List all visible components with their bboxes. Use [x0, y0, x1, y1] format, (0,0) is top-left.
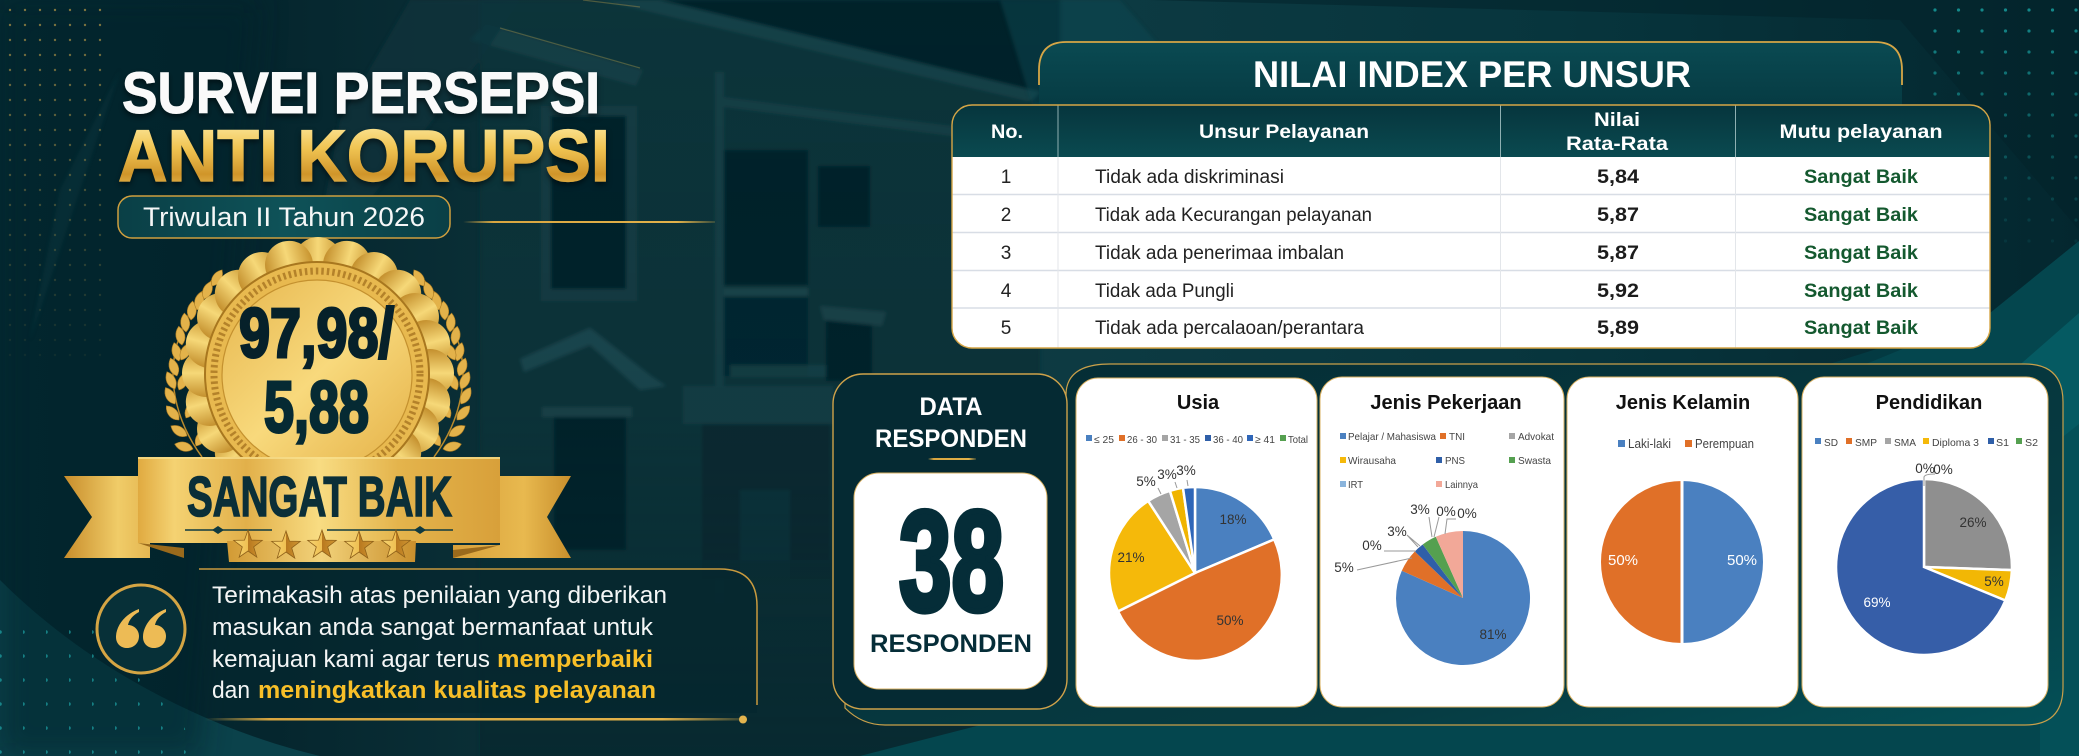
pie labels: usia: 50%	[1216, 613, 1244, 628]
pie labels: pekerjaan: 0%	[1457, 506, 1477, 521]
row 1: 1	[1001, 167, 1011, 188]
pie labels: pendidikan: 26%	[1959, 515, 1987, 530]
pie labels: usia: 21%	[1117, 550, 1145, 565]
table header: No.	[991, 121, 1023, 143]
legend: pekerjaan: Swasta	[1518, 455, 1551, 467]
row 4: 5,92	[1597, 280, 1639, 302]
row 4: Tidak ada Pungli	[1095, 281, 1234, 302]
chart card: jenis kelamin	[1567, 377, 1798, 707]
pie labels: kelamin: 50%	[1727, 552, 1757, 569]
pie labels: usia: 5%	[1136, 474, 1156, 489]
row 2: Tidak ada Kecurangan pelayanan	[1095, 205, 1372, 226]
row 1: 5,84	[1597, 166, 1639, 188]
row 1: Sangat Baik	[1804, 166, 1918, 188]
table header: Rata-Rata	[1566, 133, 1668, 155]
legend: usia: ≤ 25	[1094, 434, 1114, 446]
legend: usia	[1086, 434, 1308, 446]
score value: 5,88	[264, 368, 369, 448]
ribbon: sangat baik	[64, 457, 571, 562]
row 5	[1001, 317, 1918, 339]
panel: data responden: DATA	[920, 393, 982, 421]
row 5: 5,89	[1597, 317, 1639, 339]
chart card: jenis pekerjaan	[1320, 377, 1564, 707]
pie labels: pekerjaan: 3%	[1387, 524, 1407, 539]
respondent count card: RESPONDEN	[870, 630, 1032, 658]
pie: pendidikan	[1836, 479, 2012, 655]
legend: pendidikan: Diploma 3	[1932, 437, 1979, 449]
row 3: 5,87	[1597, 242, 1639, 264]
ribbon: sangat baik: SANGAT BAIK	[187, 465, 452, 529]
quote text: Terimakasih atas penilaian yang diberikan	[212, 582, 667, 609]
legend: pekerjaan: Advokat	[1518, 431, 1554, 443]
row 3: 3	[1001, 243, 1011, 264]
chart card: usia	[1076, 378, 1317, 707]
period pill	[118, 196, 715, 238]
legend: usia: ≥ 41	[1255, 434, 1275, 446]
pie labels: usia: 3%	[1157, 467, 1177, 482]
row 3: Tidak ada penerimaa imbalan	[1095, 243, 1344, 264]
quote text: masukan anda sangat bermanfaat untuk	[212, 614, 654, 641]
legend: usia: 26 - 30	[1127, 434, 1157, 446]
legend: kelamin: Perempuan	[1695, 437, 1754, 451]
legend: kelamin	[1618, 437, 1754, 451]
legend: pekerjaan: TNI	[1449, 431, 1465, 443]
pie labels: pekerjaan: 81%	[1479, 627, 1507, 642]
legend: pekerjaan	[1340, 431, 1554, 491]
legend: pekerjaan: Lainnya	[1445, 479, 1478, 491]
pie labels: usia: 3%	[1176, 463, 1196, 478]
legend: usia: Total	[1288, 434, 1308, 446]
title: ANTI KORUPSI	[118, 116, 610, 197]
chart card: usia: Usia	[1177, 392, 1220, 414]
icon: quote mark	[97, 585, 185, 673]
pie: kelamin	[1600, 480, 1764, 644]
row 5: 5	[1001, 318, 1011, 339]
pie labels: pekerjaan: 0%	[1362, 538, 1382, 553]
row 2: 2	[1001, 205, 1011, 226]
heading tab: nilai index	[1039, 42, 1902, 110]
row 5: Sangat Baik	[1804, 317, 1918, 339]
pie labels: pekerjaan: 5%	[1334, 560, 1354, 575]
table header: Mutu pelayanan	[1780, 121, 1942, 143]
rosette	[180, 235, 456, 511]
score value	[239, 294, 394, 448]
row 4	[1001, 280, 1918, 302]
legend: pendidikan: SMP	[1855, 437, 1877, 449]
chart card: jenis kelamin: Jenis Kelamin	[1616, 392, 1750, 414]
gold medal badge	[162, 235, 474, 511]
chart card: pendidikan	[1802, 377, 2048, 707]
row 1: Tidak ada diskriminasi	[1095, 167, 1284, 188]
chart card: jenis pekerjaan: Jenis Pekerjaan	[1370, 392, 1522, 414]
legend: usia: 36 - 40	[1213, 434, 1243, 446]
table header: Unsur Pelayanan	[1199, 121, 1369, 143]
quote text: kemajuan kami agar terus	[212, 646, 490, 673]
pie labels: pendidikan: 0%	[1933, 462, 1953, 477]
pie labels: pendidikan: 69%	[1863, 595, 1891, 610]
legend: pekerjaan: IRT	[1348, 479, 1364, 491]
row 3	[1001, 242, 1918, 264]
quote text	[212, 582, 667, 704]
pie labels: pekerjaan: 3%	[1410, 502, 1430, 517]
pie labels: usia: 18%	[1219, 512, 1247, 527]
row 4: 4	[1001, 281, 1012, 302]
respondent count card: 38	[899, 482, 1004, 641]
pie labels: pendidikan	[1863, 461, 2004, 610]
panel: charts container	[845, 364, 2063, 725]
pie labels: kelamin	[1608, 552, 1757, 569]
pie labels: pekerjaan: 0%	[1436, 504, 1456, 519]
legend: pendidikan: S1	[1996, 437, 2009, 449]
panel: data responden: RESPONDEN	[875, 425, 1027, 453]
row 1	[1001, 166, 1918, 188]
quote panel	[97, 569, 757, 724]
legend: pendidikan: S2	[2025, 437, 2038, 449]
table header	[991, 109, 1942, 155]
respondent count card	[854, 473, 1047, 689]
row 2	[1001, 204, 1918, 226]
pie labels: usia	[1117, 463, 1247, 628]
row 2: 5,87	[1597, 204, 1639, 226]
laurel left	[162, 268, 226, 457]
panel: data responden	[833, 374, 1067, 709]
pie labels: pekerjaan	[1334, 502, 1507, 642]
table: nilai per unsur	[952, 105, 1990, 348]
pie: usia	[1109, 487, 1282, 661]
legend: pekerjaan: Pelajar / Mahasiswa	[1348, 431, 1436, 443]
row 2: Sangat Baik	[1804, 204, 1918, 226]
heading tab: nilai index: NILAI INDEX PER UNSUR	[1253, 54, 1691, 95]
table header: Nilai	[1594, 109, 1640, 131]
legend: pendidikan: SD	[1824, 437, 1838, 449]
legend: kelamin: Laki-laki	[1628, 437, 1671, 451]
quote text: memperbaiki	[497, 646, 653, 673]
pie labels: pendidikan: 5%	[1984, 574, 2004, 589]
pie: pekerjaan	[1396, 531, 1530, 665]
title	[118, 61, 610, 197]
pie labels: kelamin: 50%	[1608, 552, 1638, 569]
score value: 97,98/	[239, 294, 394, 372]
quote text: dan	[212, 677, 250, 704]
five stars	[234, 530, 410, 558]
laurel right	[410, 268, 474, 457]
legend: pekerjaan: PNS	[1445, 455, 1465, 467]
title: SURVEI PERSEPSI	[122, 61, 600, 126]
legend: pekerjaan: Wirausaha	[1348, 455, 1396, 467]
legend: pendidikan	[1815, 437, 2038, 449]
quote text: meningkatkan kualitas pelayanan	[258, 677, 656, 704]
legend: pendidikan: SMA	[1894, 437, 1916, 449]
legend: usia: 31 - 35	[1170, 434, 1200, 446]
row 4: Sangat Baik	[1804, 280, 1918, 302]
period pill: Triwulan II Tahun 2026	[143, 202, 425, 232]
chart card: pendidikan: Pendidikan	[1876, 392, 1982, 414]
row 5: Tidak ada percalaoan/perantara	[1095, 318, 1364, 339]
row 3: Sangat Baik	[1804, 242, 1918, 264]
pie labels: pendidikan: 0%	[1915, 461, 1935, 476]
